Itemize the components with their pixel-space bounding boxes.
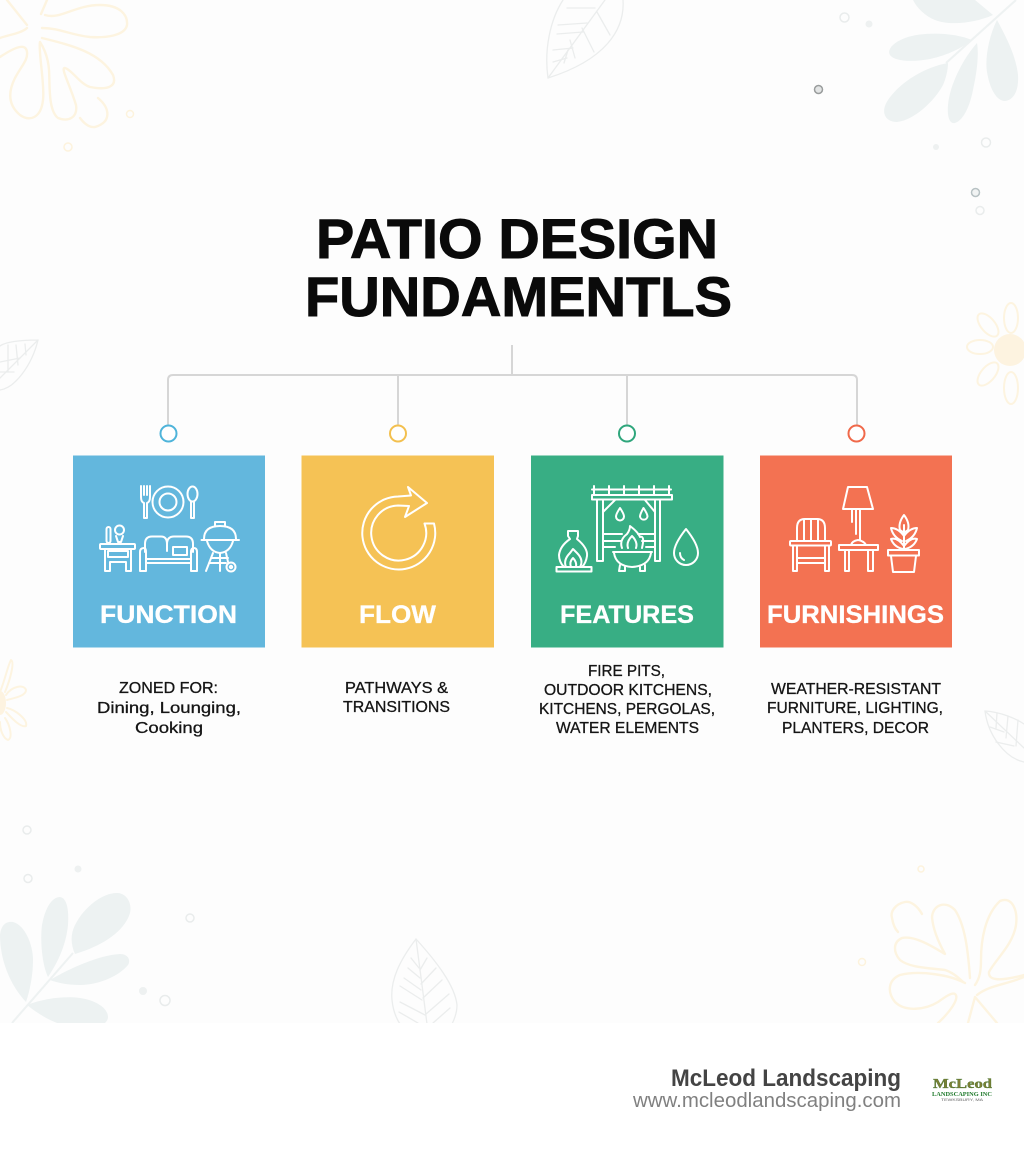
text block: function description: Dining, Lounging, <box>97 700 241 717</box>
footer band <box>0 1023 1024 1154</box>
decoration: bubbles top right <box>814 13 990 214</box>
decoration: flower outline bottom right <box>890 900 1024 1023</box>
footer: website: www.mcleodlandscaping.com <box>632 1090 901 1112</box>
text block: furnishings description: PLANTERS, DECOR <box>782 720 929 737</box>
panel: function <box>73 456 265 648</box>
text block: furnishings description <box>767 681 943 737</box>
footer: logo <box>932 1077 992 1102</box>
decoration: daisy right edge <box>967 303 1024 404</box>
title <box>305 207 732 328</box>
icon: circular arrow <box>362 487 435 569</box>
text block: features description: WATER ELEMENTS <box>556 720 699 737</box>
label: FEATURES <box>560 601 694 629</box>
footer: company name: McLeod Landscaping <box>671 1065 901 1092</box>
decoration: flower outline top left <box>0 0 127 127</box>
footer: logo: TEWKSBURY, MA <box>941 1098 984 1102</box>
label: FUNCTION <box>100 601 237 629</box>
panel: flow <box>302 456 494 648</box>
label: FURNISHINGS <box>767 601 944 629</box>
text block: function description: Cooking <box>135 720 203 737</box>
text block: features description: FIRE PITS, <box>588 663 665 680</box>
text block: features description: KITCHENS, PERGOLAS, <box>539 701 715 718</box>
icon: chair, lamp, table and plant <box>790 487 919 572</box>
text block: furnishings description: WEATHER-RESISTANT <box>771 681 941 698</box>
node: function <box>160 426 176 442</box>
node: features <box>619 426 635 442</box>
icon: dining and living <box>100 486 239 572</box>
decoration: leaf branch top right <box>884 0 1018 123</box>
decoration: outline leaf bottom center <box>392 939 457 1024</box>
text block: function description: ZONED FOR: <box>119 680 218 697</box>
text block: flow description: TRANSITIONS <box>343 699 450 716</box>
text block: flow description <box>343 680 450 716</box>
text block: flow description: PATHWAYS & <box>345 680 448 697</box>
title: FUNDAMENTLS <box>305 265 732 328</box>
panel: furnishings <box>760 456 952 648</box>
decoration: small yellow rings bottom right <box>858 866 924 966</box>
decoration: daisy left edge <box>0 660 26 740</box>
text block: features description <box>539 663 715 737</box>
title: PATIO DESIGN <box>316 207 718 270</box>
decoration: leaf branch bottom left <box>0 893 130 1024</box>
footer: logo: LANDSCAPING INC <box>932 1091 992 1098</box>
node: flow <box>390 426 406 442</box>
icon: pergola, fire pit and water <box>556 486 698 572</box>
connector tree <box>168 345 857 425</box>
footer: logo: McLeod <box>933 1077 992 1092</box>
decoration: outline leaf left edge <box>0 340 38 390</box>
label: FLOW <box>359 601 436 629</box>
decoration: bubbles bottom left <box>23 826 194 1006</box>
decoration: outline leaf top center <box>547 0 623 78</box>
node: furnishings <box>848 426 864 442</box>
text block: function description <box>97 680 241 737</box>
decoration: small yellow rings top left <box>64 110 134 151</box>
panel: features <box>531 456 724 648</box>
text block: furnishings description: FURNITURE, LIGHTING, <box>767 700 943 717</box>
decoration: outline leaf right edge <box>985 711 1024 762</box>
text block: features description: OUTDOOR KITCHENS, <box>544 682 712 699</box>
